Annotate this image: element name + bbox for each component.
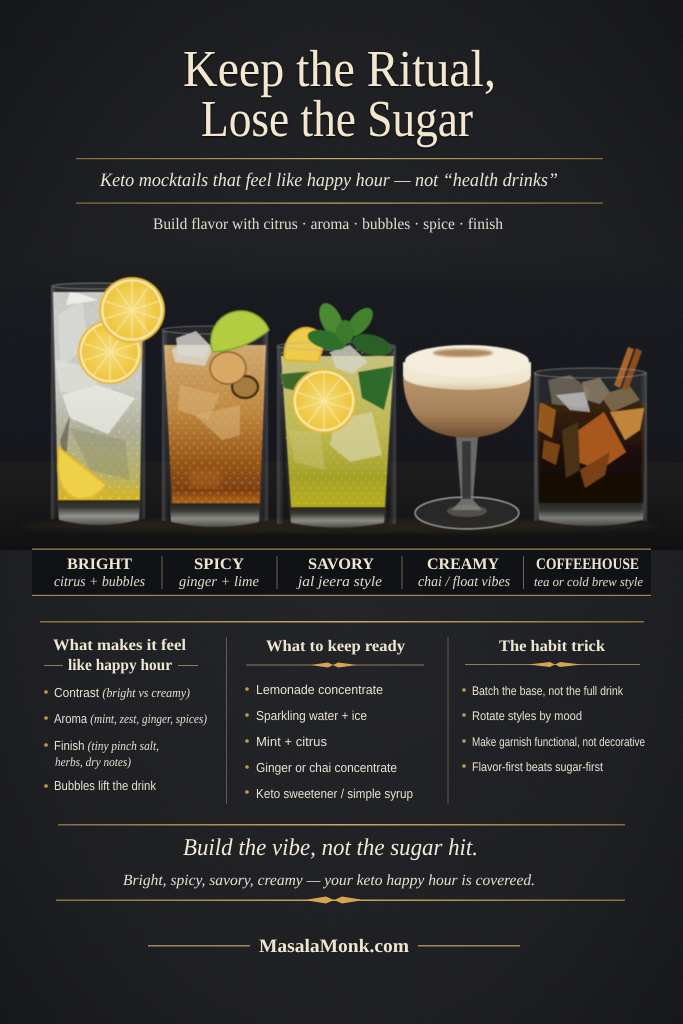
drink: spicy ginger glass xyxy=(160,311,270,527)
heading: What to keep ready xyxy=(266,638,405,655)
title xyxy=(183,41,496,148)
title: Lose the Sugar xyxy=(201,91,473,148)
style: spicy: ginger + lime xyxy=(179,574,260,590)
ingredient list: Sparkling water + ice xyxy=(256,708,367,723)
photo: five drinks on a dark table xyxy=(0,277,683,550)
footer ornament divider xyxy=(56,896,625,904)
heading: The habit trick xyxy=(499,638,605,655)
habit list xyxy=(462,684,645,774)
heading xyxy=(44,637,198,674)
style: spicy xyxy=(179,556,260,590)
bullet: finish: herbs, dry notes) xyxy=(55,755,131,769)
closing headline: Build the vibe, not the sugar hit. xyxy=(183,835,478,861)
drink: bright citrus glass xyxy=(50,277,165,525)
table surface xyxy=(0,462,683,550)
heading: like happy hour xyxy=(68,657,172,674)
panel: the habit trick xyxy=(462,638,645,774)
style: savory: SAVORY xyxy=(308,556,374,573)
drink: savory mint glass xyxy=(277,299,396,528)
style: coffeehouse: COFFEEHOUSE xyxy=(536,556,639,573)
ingredient list xyxy=(245,682,413,801)
panel: what makes it feel like happy hour xyxy=(44,637,207,793)
subtitle with rules: Keto mocktails that feel like happy hour — not “health drinks” xyxy=(99,170,558,191)
title: Keep the Ritual, xyxy=(183,41,496,98)
habit list: Make garnish functional, not decorative xyxy=(472,735,645,749)
bullet: contrast: Contrast (bright vs creamy) xyxy=(54,685,190,700)
style: creamy: CREAMY xyxy=(427,556,499,573)
ingredient list: Keto sweetener / simple syrup xyxy=(256,786,413,801)
flavor style band xyxy=(32,548,651,596)
bullet: aroma: Aroma (mint, zest, ginger, spices) xyxy=(54,711,207,726)
closing subline: Bright, spicy, savory, creamy — your keto happy hour is covereed. xyxy=(123,872,535,889)
drink: creamy coupe xyxy=(403,345,531,529)
heading: What makes it feel xyxy=(53,637,187,654)
bullet: finish: Finish (tiny pinch salt, xyxy=(54,738,159,753)
bullet: finish xyxy=(44,738,159,769)
style: coffeehouse: tea or cold brew style xyxy=(534,574,643,589)
drink: coffeehouse rocks glass xyxy=(534,347,647,526)
bullet: bubbles: Bubbles lift the drink xyxy=(54,778,156,793)
ingredient list: Ginger or chai concentrate xyxy=(256,760,397,775)
ingredient list: Mint + citrus xyxy=(256,734,328,749)
style: spicy: SPICY xyxy=(194,556,244,573)
ornament divider xyxy=(465,662,640,667)
style: coffeehouse xyxy=(534,556,643,589)
style: savory xyxy=(296,556,383,590)
ingredient list: Lemonade concentrate xyxy=(256,682,383,697)
habit list: Batch the base, not the full drink xyxy=(472,684,624,698)
style: savory: jal jeera style xyxy=(296,574,383,590)
ornament divider xyxy=(246,662,424,668)
style: bright: BRIGHT xyxy=(67,556,132,573)
website footer: MasalaMonk.com xyxy=(259,936,409,957)
style: creamy xyxy=(418,556,510,590)
style: creamy: chai / float vibes xyxy=(418,574,510,590)
style: bright xyxy=(54,556,145,590)
panel: what to keep ready xyxy=(245,638,424,801)
habit list: Rotate styles by mood xyxy=(472,709,582,723)
habit list: Flavor-first beats sugar-first xyxy=(472,760,603,774)
style: bright: citrus + bubbles xyxy=(54,574,145,590)
flavor tagline: Build flavor with citrus · aroma · bubbles · spice · finish xyxy=(153,216,503,233)
